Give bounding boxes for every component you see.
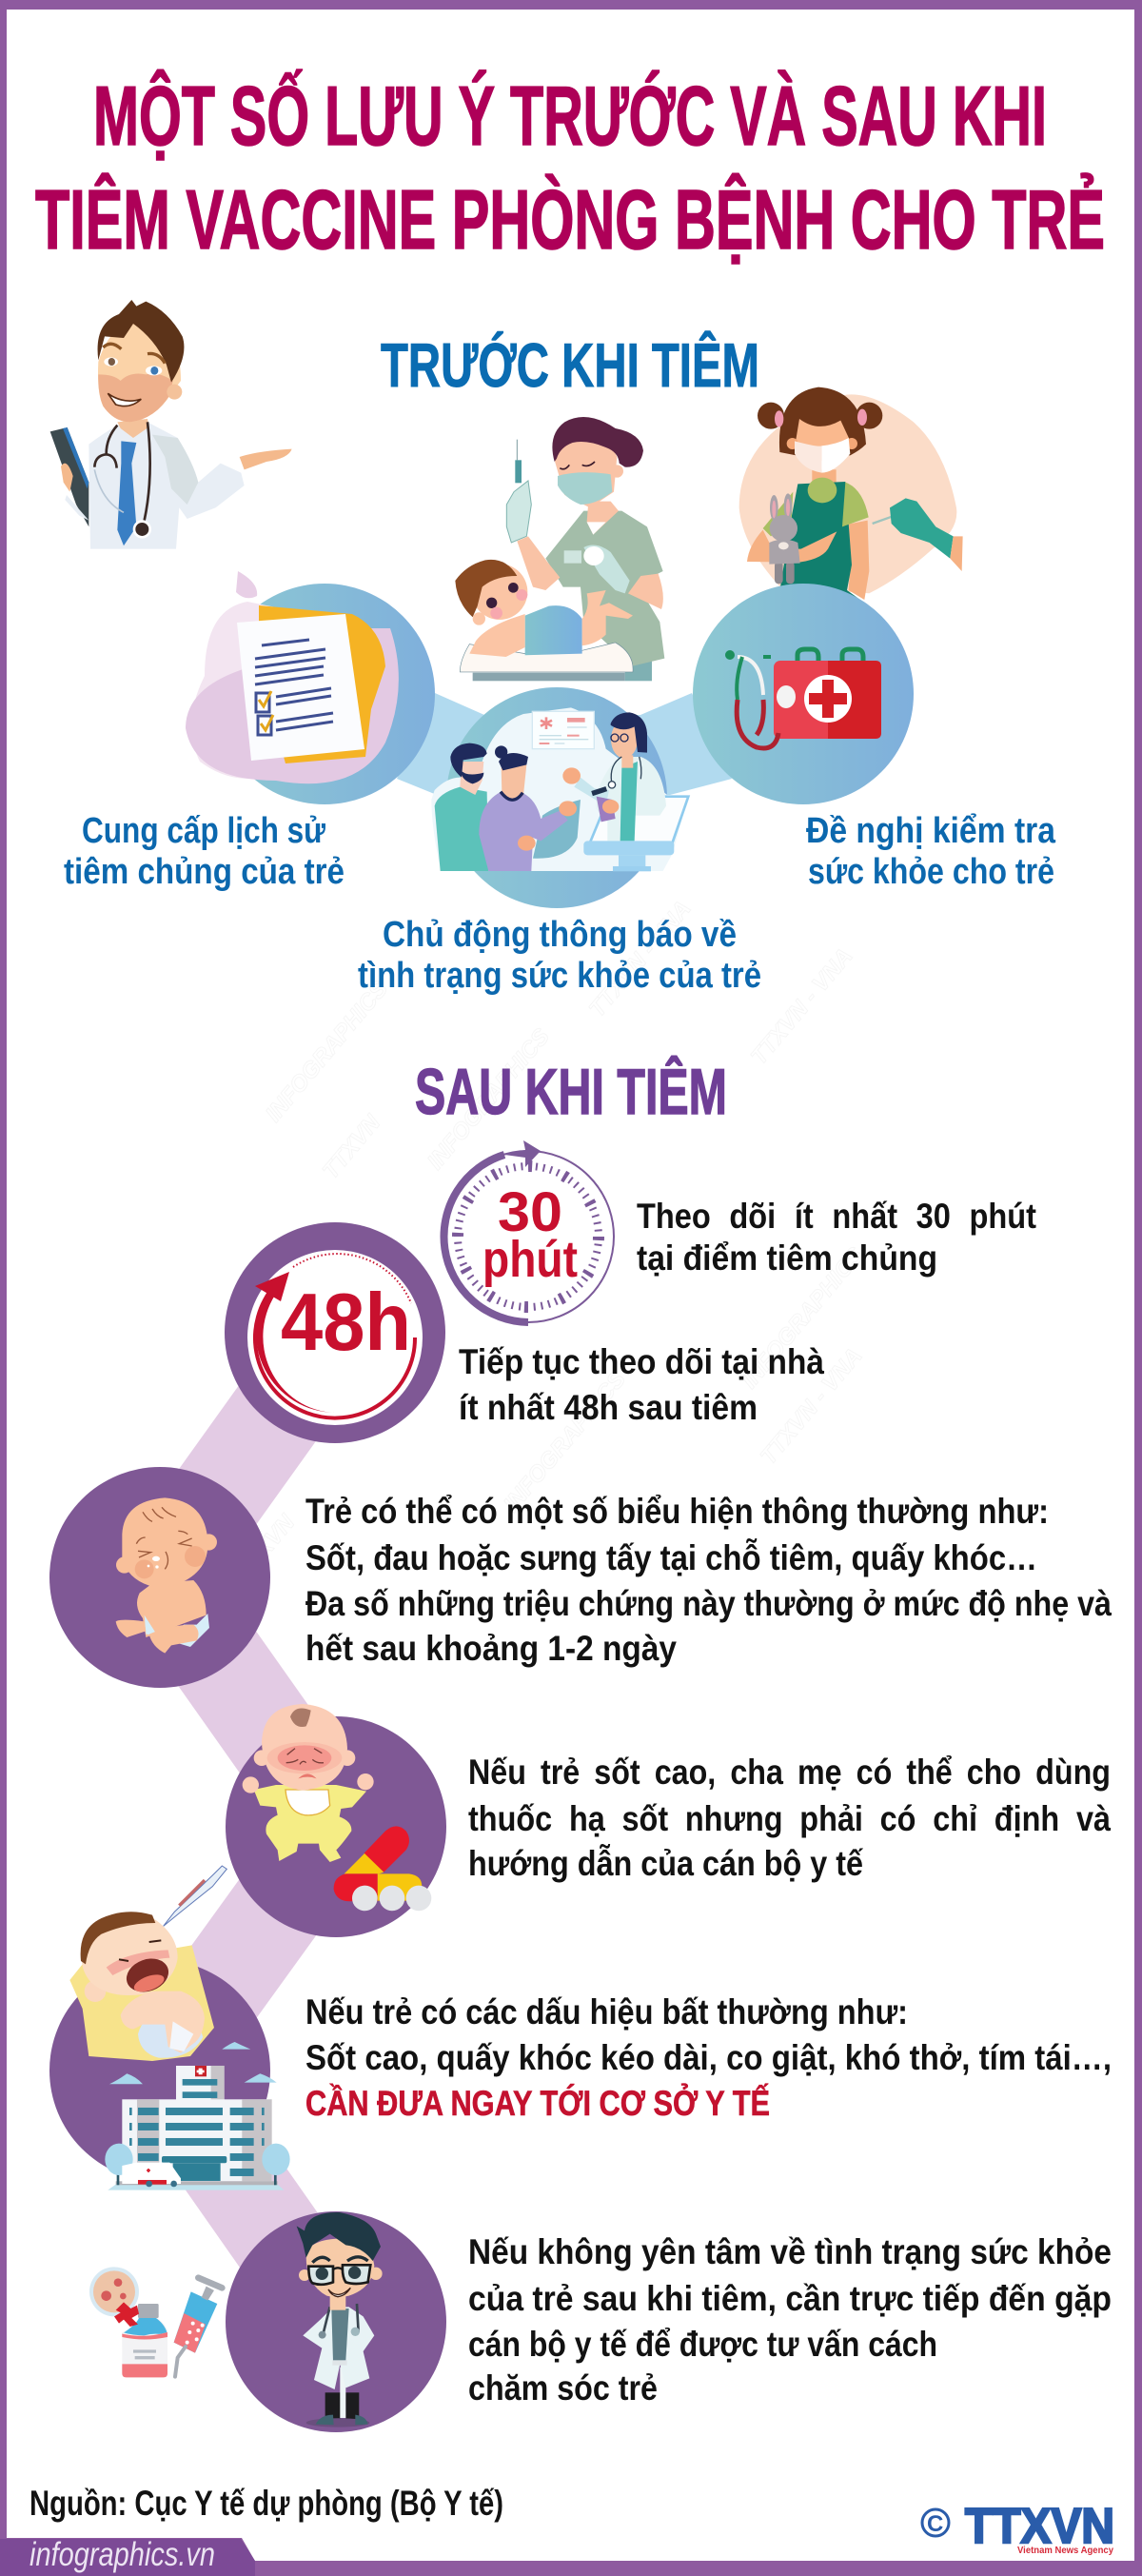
- panel: medical records circle: [186, 571, 435, 804]
- text: consult health worker: cán bộ y tế để được tư vấn cách: [468, 2325, 937, 2364]
- text: monitor 30 minutes: [637, 1197, 1036, 1278]
- text: monitor 30 minutes: tại điểm tiêm chủng: [637, 1238, 937, 1278]
- panel: feverish baby and medicine: [226, 1704, 446, 1937]
- footer tab: infographics.vn: infographics.vn: [30, 2536, 215, 2573]
- icon: vial and rash: [89, 2267, 167, 2377]
- text: monitor 30 minutes: Theo dõi ít nhất 30 phút: [637, 1197, 1036, 1236]
- text: common symptoms: Sốt, đau hoặc sưng tấy tại chỗ tiêm, quấy khóc…: [305, 1538, 1037, 1577]
- icon: pills: [334, 1826, 431, 1911]
- panel: sneezing baby: [49, 1467, 270, 1688]
- text: TTXVN: [318, 1110, 386, 1184]
- text: provide vaccination history: tiêm chủng của trẻ: [64, 852, 345, 892]
- icon: 30-minute clock: 30: [498, 1181, 562, 1243]
- icon: 48h ring: [225, 1222, 445, 1443]
- text: proactively inform: [358, 915, 761, 996]
- icon: 30-minute clock: [443, 1140, 614, 1322]
- panel: consult a doctor: [89, 2211, 446, 2432]
- text: continue monitoring 48h: [459, 1342, 824, 1427]
- text: TTXVN - VNA: [584, 896, 696, 1022]
- text: abnormal signs: [305, 1992, 1112, 2123]
- icon: nurse with baby: [455, 417, 664, 681]
- text: INFOGRAPHICS: [261, 977, 393, 1127]
- text: consult health worker: [468, 2232, 1112, 2408]
- title: [35, 69, 1105, 267]
- icon: pink blobs: [186, 571, 399, 783]
- text: INFOGRAPHICS: [499, 1367, 631, 1517]
- icon: girl receiving vaccine: [739, 387, 963, 603]
- text: common symptoms: Trẻ có thể có một số biểu hiện thông thường như:: [305, 1492, 1049, 1531]
- text: request health check: [806, 811, 1056, 892]
- panel: crying baby and hospital: [49, 1866, 290, 2190]
- text: proactively inform: tình trạng sức khỏe của trẻ: [358, 956, 761, 996]
- connector band: before-vaccination circles: [397, 693, 732, 795]
- logo: TTXVN: Vietnam News Agency: [1017, 2546, 1113, 2556]
- icon: doctor pointing: [50, 300, 292, 549]
- icon: 48h ring: 48h: [281, 1278, 411, 1368]
- text: INFOGRAPHICS: [423, 1024, 555, 1175]
- logo: TTXVN: C: [927, 2511, 943, 2537]
- text: request health check: Đề nghị kiểm tra: [806, 811, 1056, 851]
- footer tab: infographics.vn: [0, 2536, 1142, 2576]
- text: abnormal signs: Nếu trẻ có các dấu hiệu bất thường như:: [305, 1992, 908, 2031]
- panel: family consultation circle: [431, 687, 688, 908]
- panel: health check circle: [693, 584, 914, 804]
- text: proactively inform: Chủ động thông báo về: [383, 915, 737, 955]
- icon: baby in yellow: [243, 1704, 431, 1911]
- heading: after vaccination: SAU KHI TIÊM: [415, 1055, 727, 1128]
- text: consult health worker: chăm sóc trẻ: [468, 2368, 658, 2408]
- connector band: after-vaccination steps: [160, 1333, 336, 2322]
- icon: document folder: [237, 605, 385, 786]
- source: Nguồn: Cục Y tế dự phòng (Bộ Y tế): [30, 2484, 503, 2523]
- icon: 30-minute clock: phút: [482, 1231, 578, 1288]
- text: TTXVN - VNA: [746, 943, 857, 1070]
- text: TTXVN: [232, 1510, 301, 1584]
- icon: cartoon doctor: [297, 2212, 383, 2427]
- text: continue monitoring 48h: Tiếp tục theo dõi tại nhà: [459, 1342, 824, 1381]
- logo: TTXVN: TTXVN: [965, 2499, 1114, 2554]
- text: common symptoms: hết sau khoảng 1-2 ngày: [305, 1629, 677, 1668]
- text: continue monitoring 48h: ít nhất 48h sau tiêm: [459, 1388, 758, 1427]
- text: abnormal signs: CẦN ĐƯA NGAY TỚI CƠ SỞ Y TẾ: [305, 2083, 770, 2123]
- text: TTXVN - VNA: [756, 1343, 867, 1470]
- illustration: family and doctor: [431, 707, 688, 871]
- text: common symptoms: [305, 1492, 1112, 1668]
- icon: syringe: [174, 2278, 222, 2377]
- text: high fever advice: hướng dẫn của cán bộ y tế: [468, 1844, 863, 1883]
- text: high fever advice: [468, 1753, 1111, 1883]
- illustration: crying baby, thermometer, hospital: [69, 1866, 290, 2190]
- text: INFOGRAPHICS: [737, 1243, 869, 1394]
- icon: stethoscope and kit: [725, 649, 881, 748]
- icon: baby: [116, 1497, 217, 1654]
- text: provide vaccination history: Cung cấp lịch sử: [82, 811, 325, 851]
- heading: before vaccination: TRƯỚC KHI TIÊM: [381, 330, 759, 400]
- text: request health check: sức khỏe cho trẻ: [808, 852, 1054, 892]
- text: provide vaccination history: [64, 811, 345, 892]
